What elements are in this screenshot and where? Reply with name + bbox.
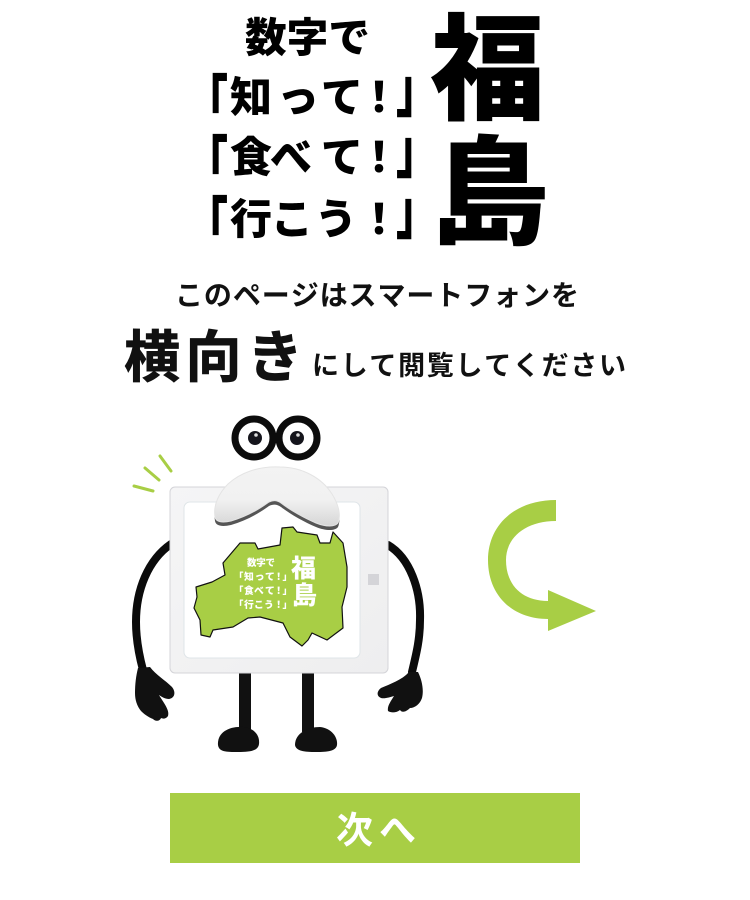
instruction text [124,280,626,389]
title line 4: 」 [396,178,438,247]
map text: Fukushima: 福 [291,555,316,583]
title line 2: 「 [186,72,228,141]
mustache shadow [215,471,339,530]
left eye [235,419,273,457]
map text: catch copy: 「知って！」 [234,570,292,583]
title line 4 [186,178,438,263]
title line 3: 」 [396,117,438,186]
mustache [215,467,339,526]
right arm [388,545,420,672]
right leg [302,670,314,732]
left hand [135,667,174,721]
map text: Fukushima [291,555,317,610]
button label: 次へ [336,810,416,851]
map text: catch copy: 「行こう！」 [234,598,292,611]
right foot [295,727,337,752]
tablet button [368,574,379,585]
next button [170,793,580,863]
title line 3 [186,117,438,202]
title line 4: 行こう！ [230,196,400,243]
kanji: fuku: 福 [430,7,545,135]
button background [170,793,580,863]
map text: catch copy: 「食べて！」 [234,584,292,597]
map outline [194,527,347,646]
map text: Fukushima: 島 [292,582,317,610]
title line 1: 数字で [245,15,370,61]
left leg [239,670,251,732]
mascot character with tablet body [134,419,423,752]
left arm [136,544,171,670]
tablet screen [184,502,360,658]
kanji: shima: 島 [431,129,549,261]
arrow: rotate device [488,500,596,631]
title line 3: 食べて！ [230,134,400,181]
title: catch copy lines [186,15,438,263]
right eye [279,419,317,457]
left foot [218,727,259,752]
right hand [378,672,423,712]
map text: catch copy [234,557,292,611]
title line 4: 「 [186,194,228,263]
instruction line 2: にして閲覧してください [312,351,626,381]
title line 3: 「 [186,133,228,202]
title: Fukushima large kanji [430,7,549,261]
instruction line 1: このページはスマートフォンを [175,280,579,311]
title line 2 [186,56,438,141]
map of Fukushima [194,527,347,646]
map text: catch copy: 数字で [247,557,275,569]
tablet frame [170,487,388,673]
title line 2: 」 [396,56,438,125]
motion lines [134,456,171,491]
instruction emphasis: landscape: 横向き [124,326,303,389]
title line 2: 知って！ [230,74,400,121]
